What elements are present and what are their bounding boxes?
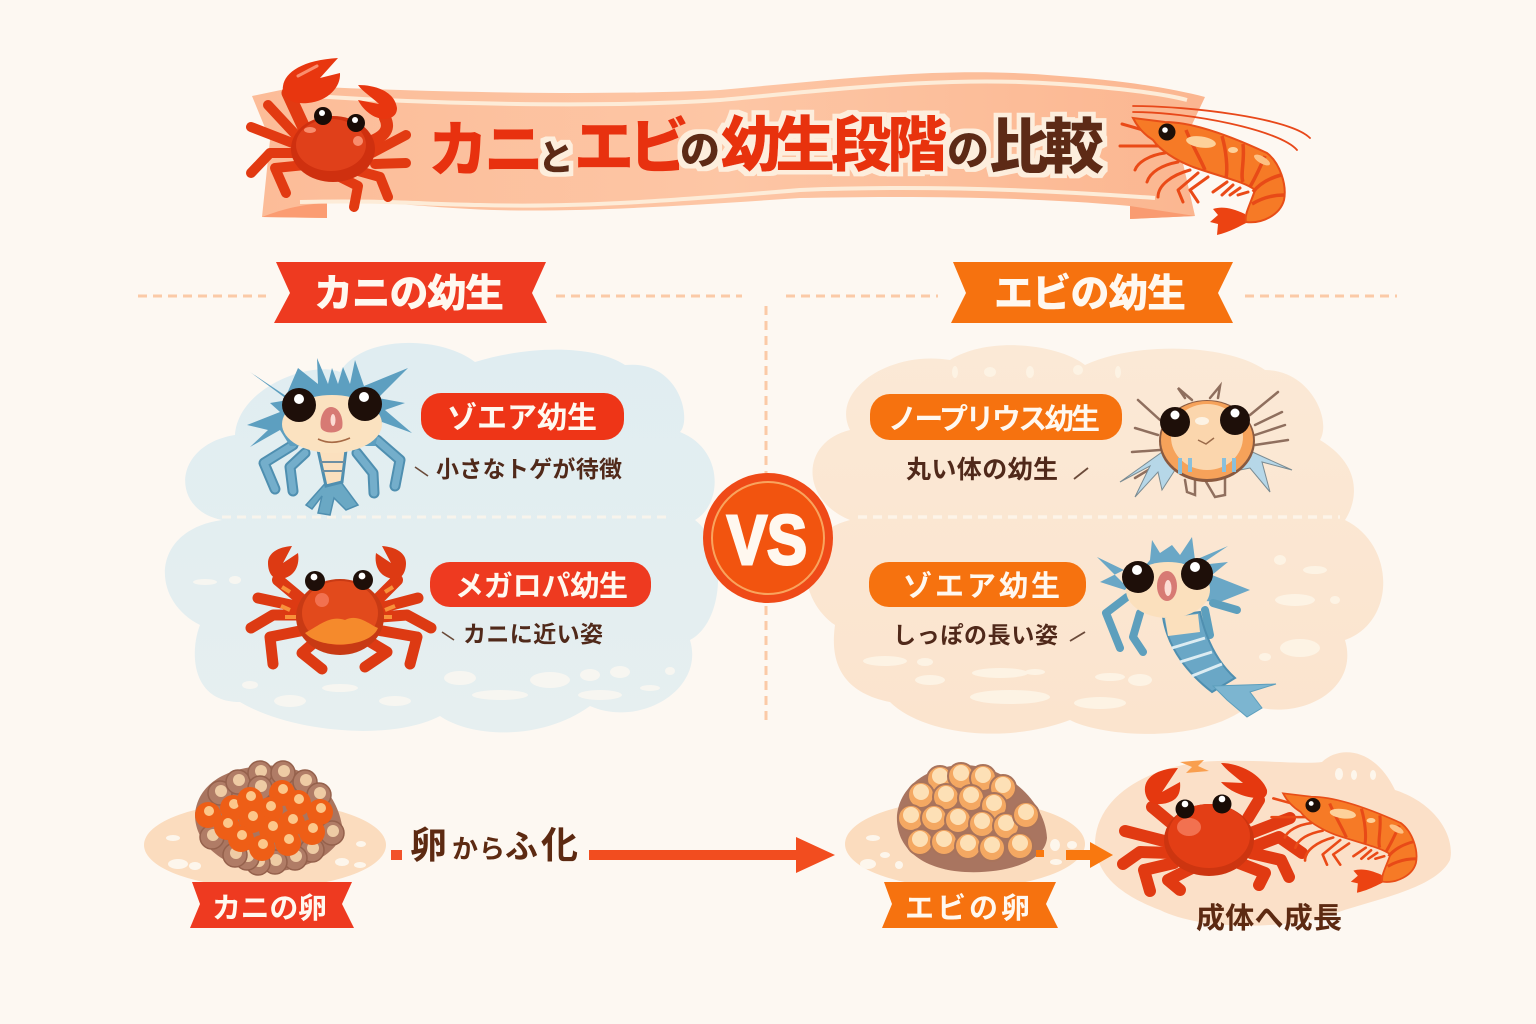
text: long tail: しっぽの長い姿: [893, 622, 1058, 648]
label: shrimp zoea: ゾエア幼生: [903, 570, 1060, 603]
icon: adult shrimp: [1272, 793, 1417, 893]
icon: shrimp zoea larva: [1097, 537, 1276, 717]
section heading: crab larvae: カニの幼生: [314, 273, 504, 316]
title text: 幼生段階: [721, 112, 947, 179]
VS badge: VS: [727, 501, 807, 579]
panel background: peach cloud: [806, 345, 1383, 734]
foam: [1335, 768, 1376, 780]
panel: shrimp larvae: [806, 345, 1383, 734]
label: shrimp eggs: [882, 882, 1058, 928]
icon: title crab: [251, 58, 406, 207]
egg mass: [195, 761, 344, 875]
label: shrimp zoea: [869, 562, 1086, 607]
icon: nauplius larva: [1120, 386, 1292, 497]
title text: 比較: [989, 114, 1104, 181]
dashed dividers: [138, 296, 1397, 722]
section heading: crab larvae: [274, 262, 547, 323]
decorative foam: [193, 576, 675, 707]
adult group: [1036, 752, 1451, 935]
blob background: [1095, 752, 1451, 926]
label: crab eggs: カニの卵: [212, 892, 327, 925]
egg mass: [897, 763, 1047, 872]
icon: title shrimp: [1120, 106, 1310, 235]
text: small spines: 小さなトゲが待徴: [436, 456, 622, 482]
section heading: shrimp larvae: [951, 262, 1233, 323]
text: to adult: 成体へ成長: [1196, 902, 1342, 935]
text: close to crab: カニに近い姿: [463, 621, 603, 647]
plate: [845, 800, 1085, 888]
label: zoea: [421, 393, 624, 440]
title text: [428, 112, 1104, 184]
hatching label: ふ: [505, 828, 538, 865]
shrimp egg group: [845, 763, 1085, 928]
icon: adult crab: [1123, 760, 1302, 891]
hatching label: 化: [541, 825, 578, 866]
text: round body: 丸い体の幼生: [906, 456, 1058, 484]
icon: megalopa crab: [251, 546, 431, 669]
label: crab eggs: [190, 882, 354, 928]
hatching label: [391, 825, 578, 866]
hatching label: から: [452, 834, 505, 864]
label: zoea: ゾエア幼生: [447, 402, 597, 435]
hatching label: 卵: [410, 825, 447, 866]
divider: [222, 516, 670, 518]
panel background: blue cloud: [165, 343, 718, 732]
panel: crab larvae: [165, 343, 718, 732]
title banner: [252, 72, 1205, 219]
plate: [144, 802, 386, 888]
title text: の: [680, 129, 720, 173]
label: nauplius: [870, 394, 1122, 440]
label: nauplius: ノープリウス幼生: [888, 403, 1100, 436]
decorative foam: [863, 365, 1340, 709]
title text: の: [947, 127, 989, 174]
title text: カニ: [428, 117, 544, 184]
foam: [166, 835, 366, 870]
icon: crab zoea larva: [247, 358, 412, 515]
label: megalopa: メガロパ幼生: [455, 570, 628, 603]
crab egg group: [144, 761, 386, 928]
title text: エビ: [574, 114, 689, 181]
divider: [858, 515, 1340, 519]
label: shrimp eggs: エビの卵: [905, 892, 1030, 925]
title text: と: [538, 137, 574, 178]
VS badge: [703, 473, 833, 603]
foam: [860, 835, 1077, 869]
section heading: shrimp larvae: エビの幼生: [994, 272, 1186, 316]
arrow: eggs to shrimp eggs: [589, 837, 835, 873]
arrow: to adults: [1036, 842, 1113, 868]
label: megalopa: [430, 562, 651, 607]
